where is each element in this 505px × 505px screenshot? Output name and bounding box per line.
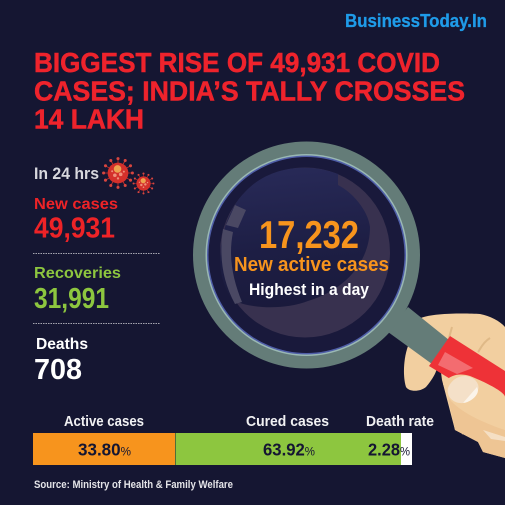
active cases label: New active cases xyxy=(234,254,389,276)
cured segment xyxy=(176,433,401,465)
bar values xyxy=(78,440,410,460)
grip highlight xyxy=(438,352,473,374)
magnifier shaft xyxy=(388,307,449,364)
magnifier lens xyxy=(193,142,420,368)
title: BIGGEST RISE OF 49,931 COVID xyxy=(34,47,440,78)
finger creases xyxy=(449,327,490,434)
active segment xyxy=(33,433,175,465)
bar chart: case share xyxy=(33,414,434,465)
source: Source: Ministry of Health & Family Welfare xyxy=(34,479,233,491)
stat: new cases xyxy=(34,196,118,244)
red grip xyxy=(429,336,505,397)
stat: deaths: Deaths xyxy=(36,336,88,353)
bar labels: Cured cases xyxy=(246,414,329,430)
brand logo: BusinessToday.In xyxy=(345,11,487,31)
active cases value: 17,232 xyxy=(259,214,359,257)
dark glass with crescent reflection edge xyxy=(220,168,370,307)
lens glint xyxy=(226,205,246,228)
thumb xyxy=(443,375,505,430)
icon: hand holding magnifier xyxy=(388,307,505,458)
bar labels xyxy=(64,414,434,430)
stat: new cases: New cases xyxy=(34,196,118,213)
bar values: 33.80% xyxy=(78,440,131,460)
title: CASES; INDIA’S TALLY CROSSES xyxy=(34,76,465,106)
bar values: 2.28% xyxy=(368,440,410,460)
death segment xyxy=(401,433,412,465)
bar values: 63.92% xyxy=(263,440,315,460)
stat: recoveries: 31,991 xyxy=(34,283,109,315)
highest in a day: Highest in a day xyxy=(249,280,369,299)
nail shine xyxy=(463,387,478,403)
title xyxy=(34,47,465,134)
thumbnail xyxy=(448,376,479,403)
stat: new cases: 49,931 xyxy=(34,212,115,244)
thumb shading xyxy=(448,397,505,458)
icon: large virus xyxy=(102,157,134,189)
bar labels: Active cases xyxy=(64,414,144,430)
second nail xyxy=(483,430,505,441)
stat: deaths: 708 xyxy=(34,354,82,386)
stat: recoveries: Recoveries xyxy=(34,265,121,282)
glass xyxy=(220,168,390,338)
bar labels: Death rate xyxy=(366,414,434,430)
palm xyxy=(421,313,505,458)
lower finger xyxy=(404,346,437,391)
frame xyxy=(193,142,420,368)
in 24 hrs label: In 24 hrs xyxy=(34,165,99,183)
title: 14 LAKH xyxy=(34,104,144,134)
icon: small virus xyxy=(133,173,154,194)
stat: recoveries xyxy=(34,265,121,315)
stat: deaths xyxy=(34,336,88,386)
